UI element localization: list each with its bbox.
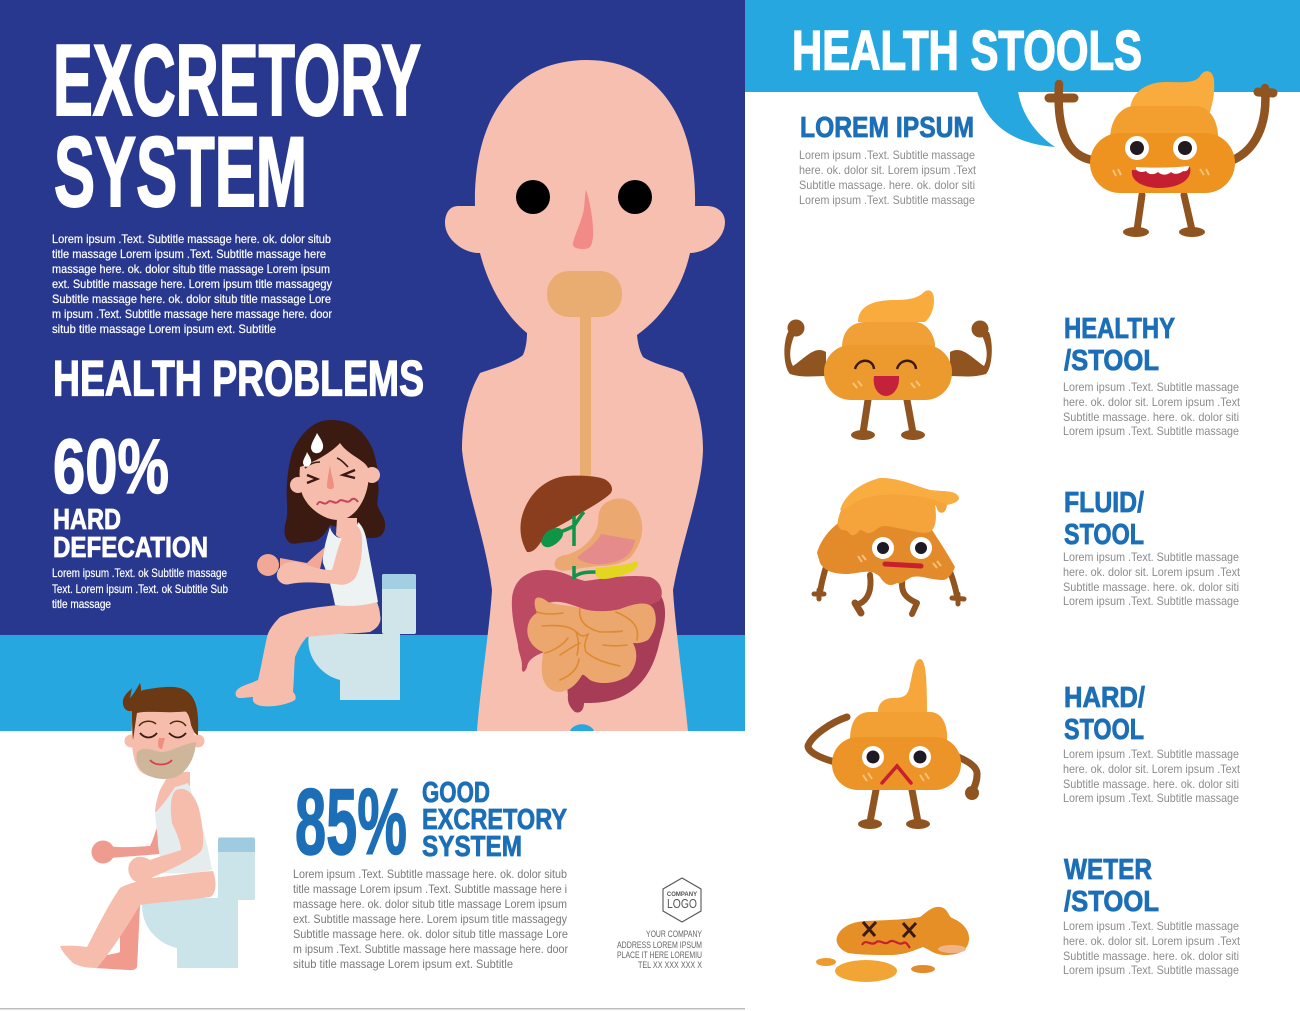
text block: good excretory body copy: title massage Lorem ipsum .Text. Subtitle massage here i: [293, 882, 567, 896]
section: lorem ipsum intro: Lorem ipsum .Text. Subtitle massage: [799, 193, 975, 207]
section: weter stool: WETER: [1064, 854, 1152, 886]
navel: [570, 724, 594, 731]
toilet: [142, 837, 255, 968]
text block: company address: YOUR COMPANY: [646, 929, 702, 939]
stat: 60% hard defecation: Lorem ipsum .Text. ok Subtitle massage: [52, 566, 227, 580]
text block: intro: m ipsum .Text. Subtitle massage here massage here. door: [52, 307, 332, 321]
text block: good excretory body copy: situb title massage Lorem ipsum ext. Subtitle: [293, 957, 513, 971]
character: hard stool: [808, 659, 979, 829]
section: lorem ipsum intro: Lorem ipsum .Text. Subtitle massage: [799, 148, 975, 162]
section: hard stool: Lorem ipsum .Text. Subtitle massage: [1063, 791, 1239, 805]
section: weter stool: /STOOL: [1064, 886, 1159, 918]
section: fluid stool: Subtitle massage. here. ok. dolor siti: [1063, 580, 1239, 594]
small intestine folds: [537, 608, 638, 680]
section: weter stool: here. ok. dolor sit. Lorem ipsum .Text: [1063, 934, 1241, 948]
singlet: [323, 522, 378, 606]
character: man on toilet: [60, 683, 255, 970]
text block: intro: ext. Subtitle massage here. Lorem ipsum title massagegy: [52, 277, 332, 291]
stat: 60% hard defecation: HARD: [53, 504, 121, 536]
heading: health problems: HEALTH PROBLEMS: [53, 350, 424, 406]
stat: 85% good excretory system: GOOD: [422, 777, 490, 809]
section: healthy stool: Lorem ipsum .Text. Subtitle massage: [1063, 424, 1239, 438]
near arm: [128, 789, 203, 883]
text block: intro: Subtitle massage here. ok. dolor situb title massage Lore: [52, 292, 331, 306]
section: healthy stool: Subtitle massage. here. ok. dolor siti: [1063, 410, 1239, 424]
large intestine: [512, 570, 665, 713]
section: hard stool: Subtitle massage. here. ok. dolor siti: [1063, 777, 1239, 791]
section: fluid stool: here. ok. dolor sit. Lorem ipsum .Text: [1063, 565, 1241, 579]
stat: 85% good excretory system: 85%: [295, 769, 407, 874]
text block: good excretory body copy: ext. Subtitle massage here. Lorem ipsum title massagegy: [293, 912, 567, 926]
section: healthy stool: [1063, 313, 1241, 438]
text block: intro: [52, 232, 332, 336]
text block: intro: title massage Lorem ipsum .Text. Subtitle massage here: [52, 247, 326, 261]
nose: [573, 190, 593, 249]
character: happy stool with raised arms: [1049, 71, 1273, 237]
stomach: [555, 499, 642, 571]
toilet: [308, 574, 416, 700]
section: fluid stool: [1063, 487, 1241, 608]
section: lorem ipsum intro: here. ok. dolor sit. Lorem ipsum .Text: [799, 163, 977, 177]
text block: company address: PLACE IT HERE LOREMIU: [617, 950, 702, 960]
title: excretory system: [53, 25, 421, 227]
section: hard stool: STOOL: [1064, 714, 1144, 746]
text block: intro: massage here. ok. dolor situb title massage Lorem ipsum: [52, 262, 330, 276]
section: lorem ipsum intro: [799, 112, 977, 207]
section: lorem ipsum intro: LOREM IPSUM: [800, 112, 974, 144]
stat: 60% hard defecation: Text. Lorem ipsum .Text. ok Subtitle Sub: [52, 582, 228, 596]
eyes: [516, 180, 550, 214]
icon: company logo: COMPANY: [667, 892, 697, 898]
far leg: [95, 905, 140, 970]
text block: good excretory body copy: m ipsum .Text. Subtitle massage here massage here. door: [293, 942, 568, 956]
stat: 60% hard defecation: [52, 424, 228, 611]
face: [290, 443, 380, 539]
stat: 85% good excretory system: EXCRETORY: [422, 804, 567, 836]
gall bladder and ducts: [541, 512, 598, 579]
far arm: [92, 827, 160, 864]
text block: company address: [617, 929, 702, 970]
section: fluid stool: STOOL: [1064, 519, 1144, 551]
liver: [520, 476, 612, 552]
thigh and near leg: [60, 871, 216, 968]
section: hard stool: [1063, 682, 1241, 805]
section: hard stool: HARD/: [1064, 682, 1145, 714]
far arm and hand: [257, 547, 325, 578]
section: hard stool: Lorem ipsum .Text. Subtitle massage: [1063, 747, 1239, 761]
section: fluid stool: FLUID/: [1064, 487, 1144, 519]
text block: good excretory body copy: Subtitle massage here. ok. dolor situb title massage Lore: [293, 927, 568, 941]
stat: 60% hard defecation: title massage: [52, 597, 111, 611]
character: healthy stool flexing: [784, 290, 992, 440]
panel: left background: [0, 0, 745, 1010]
text block: good excretory body copy: Lorem ipsum .Text. Subtitle massage here. ok. dolor situb: [293, 867, 567, 881]
text block: company address: TEL XX XXX XXX X: [638, 960, 702, 970]
title: excretory system: EXCRETORY: [53, 25, 421, 137]
character: woman on toilet: [236, 420, 416, 706]
stat: 85% good excretory system: [295, 769, 567, 874]
human body figure: [445, 60, 725, 731]
icon: company logo: LOGO: [667, 896, 697, 911]
text block: company address: ADDRESS LOREM IPSUM: [617, 940, 702, 950]
section: weter stool: Lorem ipsum .Text. Subtitle massage: [1063, 919, 1239, 933]
sweat drops: [303, 433, 323, 467]
text block: intro: Lorem ipsum .Text. Subtitle massage here. ok. dolor situb: [52, 232, 331, 246]
text block: good excretory body copy: [293, 867, 568, 971]
pancreas: [595, 561, 638, 579]
stat: 60% hard defecation: 60%: [53, 424, 169, 510]
section: healthy stool: /STOOL: [1064, 345, 1159, 377]
character: fluid stool: [814, 478, 964, 614]
icon: company logo: [663, 878, 701, 922]
mouth and esophagus: [547, 271, 622, 480]
body silhouette: [445, 60, 725, 731]
section: healthy stool: Lorem ipsum .Text. Subtitle massage: [1063, 380, 1239, 394]
near arm and hand: [277, 525, 362, 585]
text block: intro: situb title massage Lorem ipsum ext. Subtitle: [52, 322, 276, 336]
legs: [236, 602, 381, 706]
section: healthy stool: HEALTHY: [1064, 313, 1175, 345]
stat: 60% hard defecation: DEFECATION: [53, 532, 208, 564]
section: lorem ipsum intro: Subtitle massage. here. ok. dolor siti: [799, 178, 975, 192]
singlet: [155, 783, 212, 873]
character: watery stool puddle: [816, 907, 969, 982]
heading: health stools: HEALTH STOOLS: [792, 18, 1142, 81]
neck and chest: [155, 772, 190, 812]
panel: right header band: [745, 0, 1300, 147]
section: fluid stool: Lorem ipsum .Text. Subtitle massage: [1063, 594, 1239, 608]
hair: [285, 420, 385, 544]
title: excretory system: SYSTEM: [54, 116, 307, 227]
section: fluid stool: Lorem ipsum .Text. Subtitle massage: [1063, 550, 1239, 564]
section: weter stool: [1063, 854, 1241, 977]
section: hard stool: here. ok. dolor sit. Lorem ipsum .Text: [1063, 762, 1241, 776]
section: weter stool: Lorem ipsum .Text. Subtitle massage: [1063, 963, 1239, 977]
ears and face: [124, 712, 204, 779]
hair: [123, 683, 198, 740]
text block: good excretory body copy: massage here. ok. dolor situb title massage Lorem ipsum: [293, 897, 567, 911]
section: weter stool: Subtitle massage. here. ok. dolor siti: [1063, 949, 1239, 963]
stat: 85% good excretory system: SYSTEM: [422, 831, 522, 863]
section: healthy stool: here. ok. dolor sit. Lorem ipsum .Text: [1063, 395, 1241, 409]
small intestine: [527, 598, 656, 692]
